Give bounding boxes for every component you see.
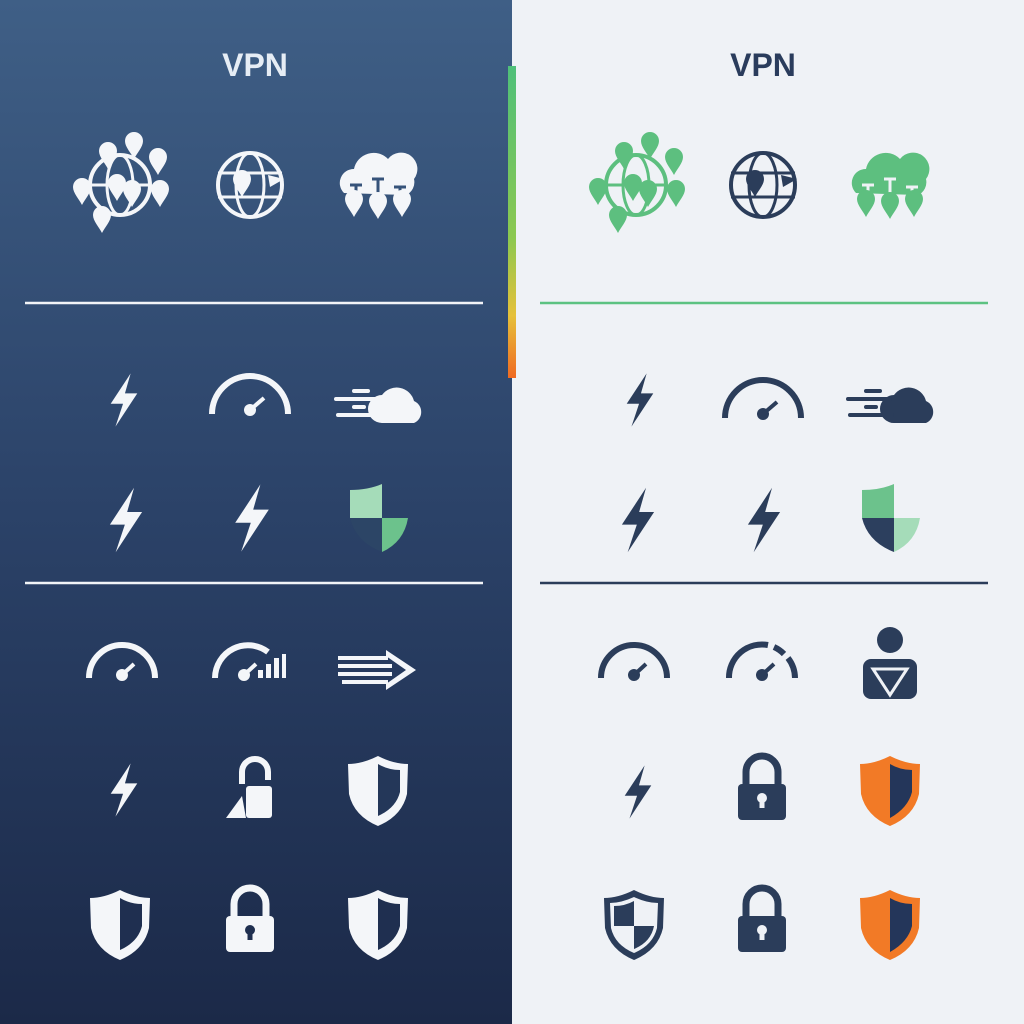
icon: gauge (right row4) bbox=[601, 645, 667, 681]
icon: person (right row4) bbox=[863, 627, 917, 699]
icon: shield orange (right row5) bbox=[860, 756, 920, 826]
icon: speed cloud (right row2) bbox=[848, 388, 933, 423]
icon: shield half (left row6) bbox=[90, 890, 150, 960]
icon: shield half (left row5) bbox=[348, 756, 408, 826]
icon: checkered shield (right row6) bbox=[604, 890, 664, 960]
panel: left dark bbox=[0, 0, 512, 1024]
icon: globe pin (right) bbox=[731, 153, 797, 217]
icon: gauge (left row2) bbox=[212, 376, 288, 416]
dividers bbox=[25, 302, 483, 304]
icon: gauge (left row4) bbox=[89, 645, 155, 681]
icon: globe with many pins (right) bbox=[589, 132, 685, 233]
icon: bolt small (left row2) bbox=[111, 373, 137, 427]
icon: gauge segmented (right row4) bbox=[729, 644, 795, 681]
icon: gauge bars (left row4) bbox=[215, 645, 286, 681]
icon: bolt (right row5) bbox=[625, 765, 651, 819]
icon: lock (right row5) bbox=[738, 756, 786, 820]
icon: bolt (right row2) bbox=[627, 373, 653, 427]
icon: lock (right row6) bbox=[738, 888, 786, 952]
panel: right light bbox=[512, 0, 1024, 1024]
icon: bolt (right row3 b) bbox=[748, 488, 780, 552]
icon: cloud network (left) bbox=[340, 153, 417, 219]
icon: shield green (left row3) bbox=[350, 484, 408, 552]
icon: broken lock (left row5) bbox=[226, 759, 272, 818]
icon: bolt (left row3 b) bbox=[235, 484, 269, 552]
icon: speed cloud (left row2) bbox=[336, 388, 421, 423]
title right: VPN bbox=[730, 47, 796, 83]
icon: shield green (right row3) bbox=[862, 484, 920, 552]
accent bar bbox=[508, 66, 516, 378]
title left: VPN bbox=[222, 47, 288, 83]
icon: shield orange (right row6) bbox=[860, 890, 920, 960]
icon: globe pin (left) bbox=[218, 153, 284, 217]
icon: lock (left row6) bbox=[226, 888, 274, 952]
icon: cloud network (right) bbox=[852, 153, 929, 219]
icon: globe with many pins (left) bbox=[73, 132, 169, 233]
icon: arrow (left row4) bbox=[338, 650, 416, 690]
icon: bolt (left row3 a) bbox=[110, 488, 142, 552]
icon: gauge (right row2) bbox=[725, 380, 801, 420]
icon: bolt (left row5) bbox=[111, 763, 137, 817]
icon: shield half (left row6 c) bbox=[348, 890, 408, 960]
icon: bolt (right row3 a) bbox=[622, 488, 654, 552]
